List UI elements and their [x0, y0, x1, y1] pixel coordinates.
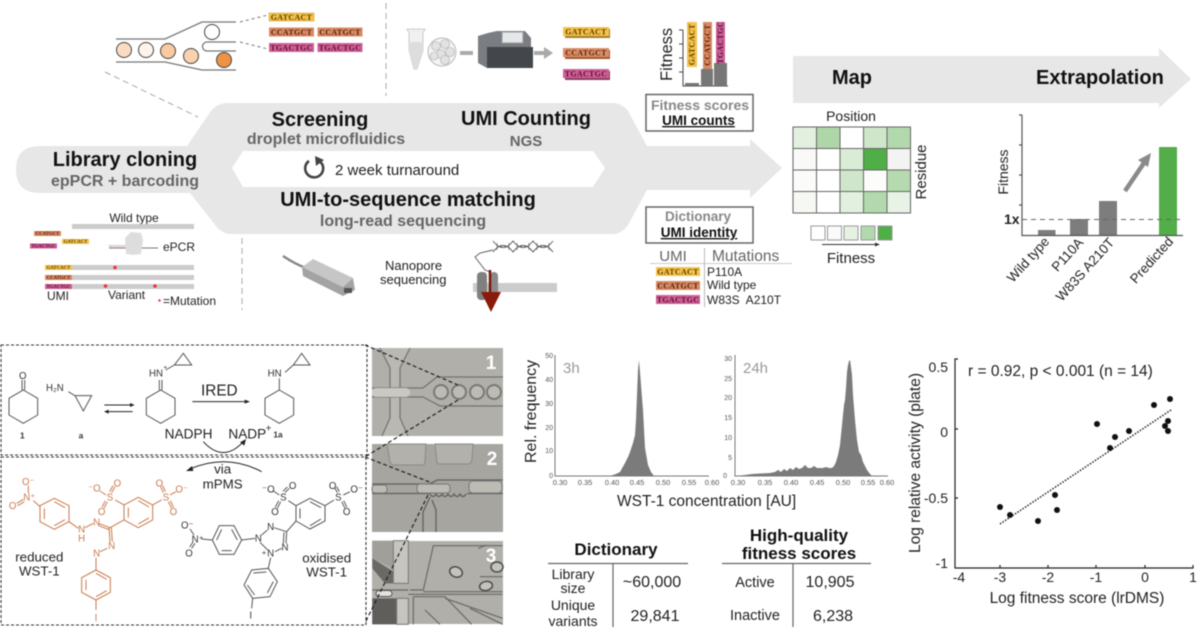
oxidised WST-1 structure: I — [249, 610, 252, 621]
box: fitness scores: UMI counts — [662, 113, 735, 128]
histogram: 24h: 0.40 — [784, 478, 798, 487]
heading: UMI counting — [461, 108, 591, 150]
turnaround label — [305, 156, 459, 179]
scatter plot: Log fitness score (lrDMS) — [990, 590, 1164, 607]
fitness heatmap: Residue — [913, 144, 930, 200]
reduced WST-1 structure: O — [9, 501, 17, 512]
nanopore sequencing illustration — [283, 241, 557, 312]
scatter plot: 0 — [1141, 569, 1149, 585]
UMI dictionary table: TGACTGC — [657, 296, 699, 304]
oxidised WST-1 structure: N — [267, 522, 274, 533]
histogram: 24h: 30 — [724, 356, 732, 363]
extrapolation bar chart: Fitness — [995, 149, 1011, 195]
micrograph 1: droplet incubation — [372, 348, 503, 436]
UMI dictionary table — [650, 248, 792, 307]
map and extrapolation arrow — [793, 48, 1191, 108]
histogram axis labels: WST-1 concentration [AU] — [617, 493, 796, 510]
library construction illustration: GATCACT — [47, 266, 71, 271]
mini fitness bar chart: TGACTGC — [716, 21, 725, 64]
oxidised WST-1 structure: N — [255, 534, 262, 545]
histogram: 3h: 50 — [545, 353, 553, 360]
oxidised WST-1 structure: ⁻O — [262, 484, 275, 495]
heading: UMI-to-sequence matching: UMI-to-sequence matching — [280, 189, 536, 211]
histogram: 3h: 0.60 — [705, 478, 719, 487]
histogram: 3h: 20 — [545, 425, 553, 432]
histogram: 24h: 25 — [724, 376, 732, 383]
reduced WST-1 structure: N — [93, 549, 100, 560]
reduced WST-1 structure: N — [78, 524, 85, 535]
histogram: 24h: 24h — [743, 360, 768, 377]
scatter plot: r = 0.92, p < 0.001 (n = 14) — [968, 363, 1153, 380]
micrograph 2: droplet picoinjection — [372, 444, 503, 532]
library construction illustration: CCATGCT — [36, 232, 60, 237]
panel: reaction scheme: HN — [149, 369, 163, 380]
droplet sorting illustration — [105, 13, 362, 117]
oxidised WST-1 structure: O — [329, 481, 337, 492]
reduced WST-1 structure: H — [78, 534, 85, 545]
panel: WST-1 reduction: reduced — [15, 550, 63, 565]
droplet sorting illustration: TGACTGC — [270, 44, 313, 52]
panel: reaction scheme: NADPH — [165, 426, 212, 441]
scatter plot — [907, 359, 1197, 607]
histogram: 24h: 0.60 — [880, 478, 894, 487]
histogram: 3h — [545, 353, 719, 487]
histogram: 24h: 0.55 — [861, 478, 875, 487]
library construction illustration: TGACTGC — [46, 285, 71, 290]
histogram: 3h: 30 — [545, 401, 553, 408]
heading: library cloning: epPCR + barcoding — [51, 173, 199, 190]
reduced WST-1 structure: N — [108, 541, 115, 552]
histogram: 24h: 15 — [724, 415, 732, 422]
histogram: 24h: 0.45 — [810, 478, 824, 487]
panel: WST-1 reduction: oxidised — [302, 550, 351, 565]
scatter plot: -1 — [936, 555, 948, 571]
NGS sequencing illustration — [242, 3, 610, 310]
panel: WST-1 reduction: WST-1 — [306, 565, 347, 580]
zoom lines linking scheme to micrographs — [365, 345, 458, 623]
micrograph 3: droplet sorting — [372, 541, 503, 624]
table: high-quality fitness scores: Inactive — [730, 608, 780, 624]
scatter plot: -3 — [994, 569, 1006, 585]
heatmap legend — [811, 226, 892, 267]
heading: screening: droplet microfluidics — [247, 131, 405, 148]
workflow arrow: library, screening and matching — [16, 103, 782, 234]
heading: screening — [247, 109, 405, 148]
histogram: 24h: 0.50 — [836, 478, 850, 487]
NGS sequencing illustration: TGACTGC — [565, 70, 607, 78]
heading: library cloning — [51, 149, 199, 190]
histogram: 3h: 40 — [545, 377, 553, 384]
extrapolation bar chart: 1x — [1004, 211, 1020, 227]
oxidised WST-1 structure: S — [280, 493, 287, 504]
mini fitness bar chart — [658, 21, 728, 86]
table: dictionary: Unique — [551, 597, 595, 613]
reduced WST-1 structure: O — [114, 479, 122, 490]
histogram: 24h: 0 — [723, 473, 727, 480]
UMI dictionary table: Wild type — [707, 278, 757, 292]
oxidised WST-1 structure: O — [185, 549, 193, 560]
library construction illustration: =Mutation — [163, 294, 216, 308]
table: dictionary: variants — [548, 613, 598, 629]
fitness heatmap — [793, 108, 930, 213]
table: high-quality fitness scores: 10,905 — [806, 574, 855, 591]
oxidised WST-1 structure: O⁻ — [181, 520, 194, 531]
table: dictionary: ~60,000 — [623, 574, 681, 591]
reduced WST-1 structure: S — [163, 493, 169, 504]
library construction illustration: ePCR — [163, 240, 195, 254]
histogram: 24h: 0.30 — [731, 478, 745, 487]
panel: WST-1 reduction: via — [214, 461, 232, 476]
heatmap legend: Fitness — [827, 250, 875, 267]
box: dictionary: Dictionary — [665, 209, 731, 224]
reduced WST-1 structure: O — [170, 507, 178, 518]
box: dictionary — [646, 207, 753, 243]
box: fitness scores: Fitness scores — [651, 97, 749, 113]
heading: screening: Screening — [272, 109, 368, 131]
histogram: 3h: 0.40 — [605, 478, 619, 487]
panel: reaction scheme: a — [79, 430, 84, 440]
heading: UMI-to-sequence matching: long-read sequencing — [320, 213, 486, 230]
scatter plot: Log relative activity (plate) — [907, 373, 924, 553]
histogram: 3h: 0.30 — [553, 478, 567, 487]
nanopore sequencing illustration: Nanopore — [385, 258, 442, 273]
extrapolation bar chart: W83S A210T — [1053, 235, 1117, 304]
table: high-quality fitness scores: 6,238 — [813, 608, 853, 625]
UMI dictionary table: UMI — [659, 248, 687, 265]
library construction illustration — [30, 211, 216, 308]
oxidised WST-1 structure: O⁻ — [350, 484, 363, 495]
histogram: 3h: 0.35 — [578, 478, 592, 487]
extrapolation bar chart — [995, 115, 1183, 304]
fitness heatmap: Position — [826, 108, 876, 124]
turnaround label: 2 week turnaround — [335, 162, 459, 179]
oxidised WST-1 structure: N⁺ — [192, 534, 204, 545]
UMI dictionary table: Mutations — [712, 248, 779, 265]
histogram axis labels: Rel. frequency — [523, 360, 540, 463]
scatter plot: 0 — [940, 424, 948, 440]
library construction illustration: Variant — [108, 288, 146, 302]
scatter plot: -2 — [1042, 569, 1054, 585]
library construction illustration: TGACTGC — [31, 245, 56, 250]
UMI dictionary table: GATCACT — [657, 268, 699, 276]
histogram: 24h: 20 — [724, 395, 732, 402]
panel: reaction scheme: IRED — [201, 382, 238, 399]
UMI dictionary table: W83S A210T — [707, 293, 782, 307]
reduced WST-1 structure: O — [156, 479, 164, 490]
nanopore sequencing illustration: sequencing — [380, 272, 446, 287]
histogram: 24h: 10 — [724, 435, 732, 442]
droplet sorting illustration: GATCACT — [271, 13, 313, 22]
micrograph 1: droplet incubation: 1 — [486, 353, 497, 374]
heading: UMI counting: NGS — [510, 133, 542, 150]
panel: WST-1 reduction: WST-1 — [19, 564, 60, 579]
reduced WST-1 structure: O⁻ — [22, 477, 35, 488]
extrapolation bar chart: Predicted — [1127, 234, 1176, 286]
reduced WST-1 structure — [9, 477, 188, 624]
box: dictionary: UMI identity — [661, 225, 738, 240]
panel: reaction scheme: NADP — [228, 426, 266, 441]
droplet sorting illustration: CCATGCT — [271, 28, 313, 37]
histogram axis labels — [523, 360, 796, 510]
panel: reaction scheme: + — [163, 364, 167, 371]
reduced WST-1 structure: O — [98, 507, 106, 518]
table: high-quality fitness scores: Active — [735, 575, 775, 591]
heading: UMI-to-sequence matching — [280, 189, 536, 230]
heading: UMI counting: UMI Counting — [461, 108, 591, 130]
panel: reaction scheme: H₂N — [46, 383, 64, 394]
reduced WST-1 structure: I — [95, 613, 97, 624]
heading: map: Map — [832, 67, 872, 89]
table: dictionary: size — [561, 580, 586, 596]
library construction illustration: UMI — [47, 289, 69, 303]
reduced WST-1 structure: O⁻ — [175, 484, 188, 495]
table: dictionary: Library — [552, 566, 594, 582]
panel: reaction scheme — [1, 345, 367, 455]
heading: library cloning: Library cloning — [53, 149, 197, 171]
histogram: 24h — [723, 355, 894, 487]
table: dictionary: Dictionary — [574, 540, 658, 559]
panel: WST-1 reduction: mPMS — [203, 476, 243, 491]
oxidised WST-1 structure: + — [262, 548, 266, 557]
scatter plot: -4 — [953, 569, 965, 585]
reduced WST-1 structure: ⁻O — [88, 484, 101, 495]
histogram: 3h: 3h — [563, 360, 580, 377]
UMI dictionary table: CCATGCT — [657, 282, 699, 290]
scatter plot: 1 — [1189, 569, 1197, 585]
micrograph 3: droplet sorting: 3 — [486, 546, 496, 567]
oxidised WST-1 structure: O — [343, 507, 351, 518]
scatter plot: -0.5 — [924, 490, 948, 506]
droplet sorting illustration: CCATGCT — [319, 28, 361, 37]
reduced WST-1 structure: N — [93, 518, 100, 529]
table: dictionary — [548, 540, 688, 629]
histogram: 3h: 10 — [545, 448, 553, 455]
oxidised WST-1 structure — [181, 481, 363, 621]
library construction illustration: CCATGCT — [47, 276, 71, 281]
oxidised WST-1 structure: N — [282, 543, 289, 554]
extrapolation bar chart: P110A — [1049, 235, 1086, 274]
mini fitness bar chart: Fitness — [658, 28, 676, 81]
micrograph 2: droplet picoinjection: 2 — [487, 449, 497, 470]
histogram: 3h: 0 — [549, 473, 553, 480]
histogram: 3h: 0.50 — [656, 478, 670, 487]
histogram: 3h: 0.55 — [682, 478, 696, 487]
scatter plot: 0.5 — [929, 359, 948, 375]
panel: reaction scheme: HN — [268, 369, 282, 380]
panel: reaction scheme: 1 — [20, 430, 25, 440]
panel: reaction scheme: + — [266, 424, 272, 435]
oxidised WST-1 structure: N — [267, 549, 274, 560]
reduced WST-1 structure: S — [107, 493, 113, 504]
heading: extrapolation: Extrapolation — [1036, 67, 1164, 89]
table: high-quality fitness scores: High-quality — [750, 526, 849, 545]
histogram: 24h: 0.35 — [758, 478, 772, 487]
oxidised WST-1 structure: O — [289, 481, 297, 492]
panel: reaction scheme: O — [19, 371, 27, 382]
UMI dictionary table: P110A — [707, 265, 742, 279]
oxidised WST-1 structure: S — [335, 493, 342, 504]
extrapolation bar chart: Wild type — [1004, 234, 1052, 285]
table: high-quality fitness scores: fitness scores — [742, 544, 856, 563]
NGS sequencing illustration: CCATGCT — [565, 48, 607, 58]
library construction illustration: GATCACT — [64, 240, 88, 245]
oxidised WST-1 structure: O — [271, 507, 279, 518]
mini fitness bar chart: GATCACT — [688, 23, 696, 65]
NGS sequencing illustration: GATCACT — [565, 28, 607, 36]
library construction illustration: Wild type — [109, 211, 159, 225]
scatter plot: -1 — [1090, 569, 1102, 585]
mini fitness bar chart: CCATGCT — [703, 24, 712, 66]
table: dictionary: 29,841 — [631, 608, 680, 625]
panel: reaction scheme: 1a — [273, 430, 283, 440]
histogram: 24h: 5 — [728, 455, 732, 462]
table: high-quality fitness scores — [722, 526, 871, 627]
box: fitness scores — [646, 94, 753, 131]
droplet sorting illustration: TGACTGC — [319, 44, 361, 52]
panel: WST-1 reduction — [1, 457, 366, 625]
histogram: 3h: 0.45 — [630, 478, 644, 487]
reduced WST-1 structure: N⁺ — [23, 493, 35, 504]
